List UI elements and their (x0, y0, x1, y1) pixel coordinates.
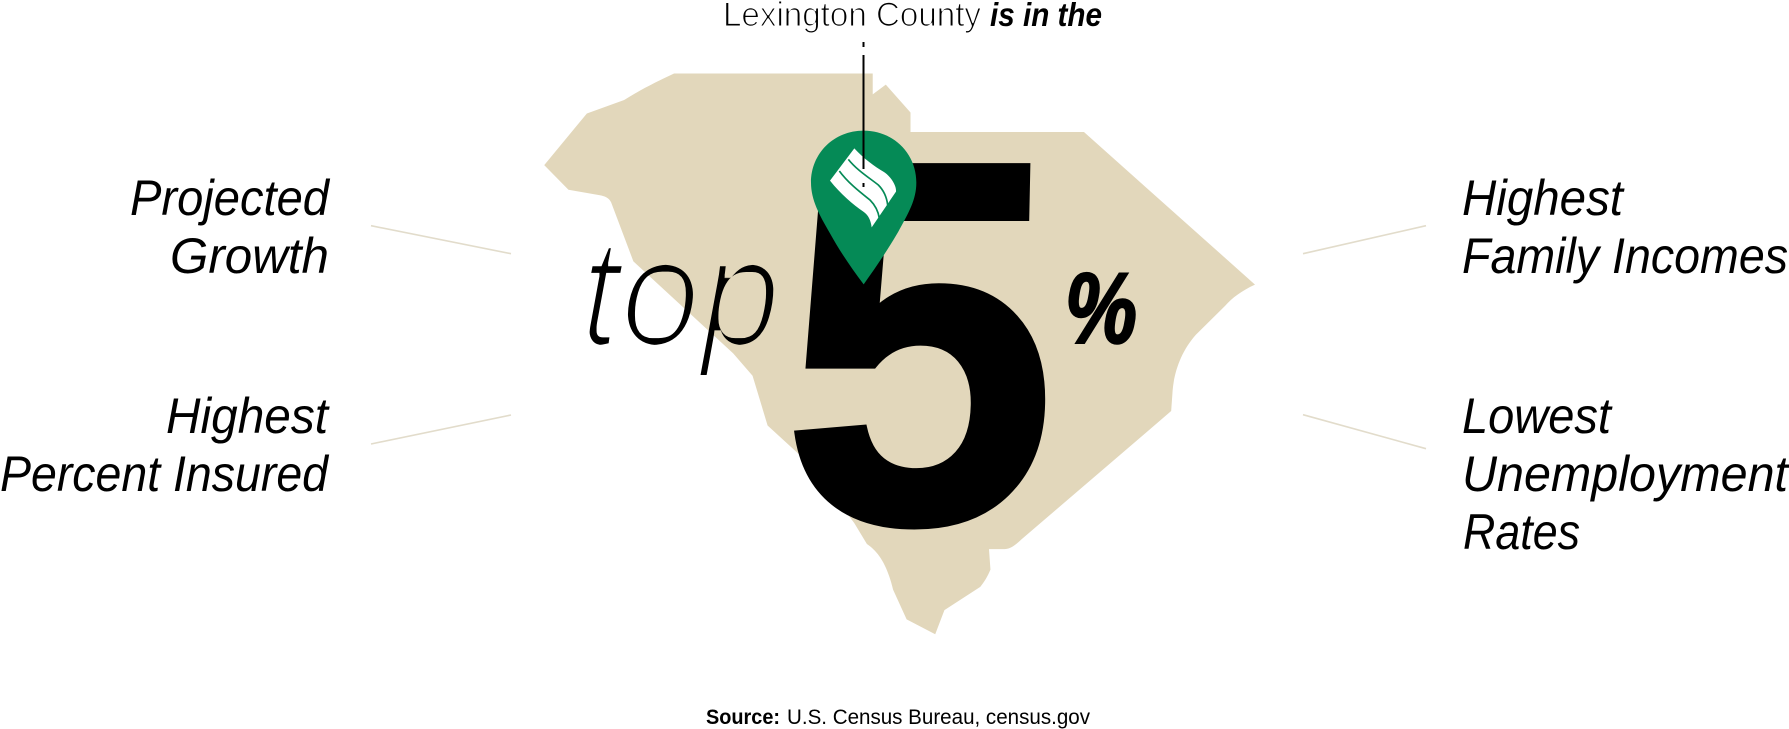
connector: Highest Percent Insured (371, 415, 511, 444)
label: Highest Family Incomes (1462, 170, 1788, 284)
word: top: top (580, 208, 781, 378)
big numeral 5: 5 (777, 54, 1064, 633)
label: Highest Percent Insured: Highest (166, 388, 330, 444)
percent sign: % (1065, 253, 1137, 365)
label: Highest Percent Insured: Percent Insured (0, 446, 330, 502)
label: Lowest Unemployment Rates: Rates (1463, 504, 1580, 560)
label: Projected Growth: Growth (170, 228, 329, 284)
icon: white swoosh logo (830, 148, 896, 227)
icon: green map pin with logo (811, 131, 916, 284)
label: Lowest Unemployment Rates (1462, 388, 1789, 560)
label: Highest Family Incomes: Highest (1462, 170, 1625, 226)
heading: Lexington County is in the (723, 0, 1102, 34)
map: South Carolina silhouette (544, 73, 1255, 634)
pointer line from heading to pin (862, 42, 864, 187)
label: Highest Percent Insured (0, 388, 330, 502)
connector: Highest Family Incomes (1303, 226, 1426, 254)
label: Lowest Unemployment Rates: Lowest (1462, 388, 1613, 444)
connector: Projected Growth (371, 226, 511, 254)
connector: Lowest Unemployment Rates (1303, 415, 1426, 449)
label: Projected Growth: Projected (130, 170, 331, 226)
label: Projected Growth (130, 170, 331, 284)
label: Lowest Unemployment Rates: Unemployment (1462, 446, 1789, 502)
source line: U.S. Census Bureau, census.gov (787, 706, 1090, 729)
source line: Source: (706, 706, 780, 729)
